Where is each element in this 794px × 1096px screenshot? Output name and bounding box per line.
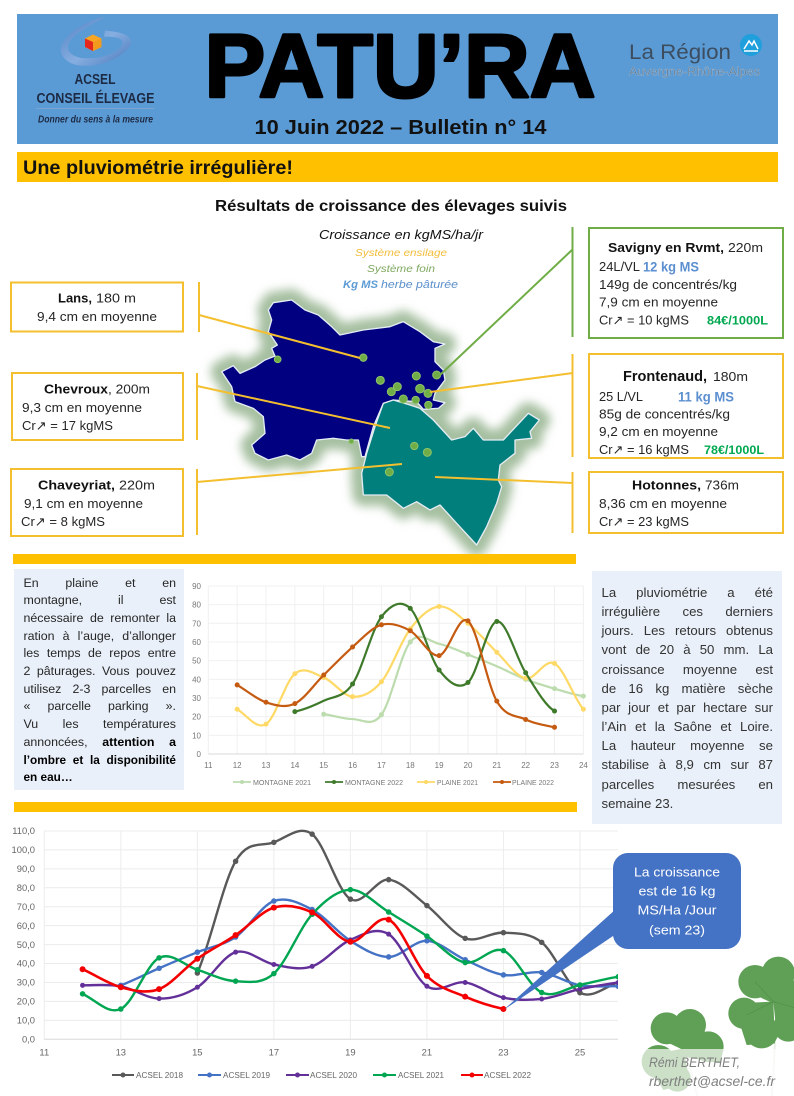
site box: Frontenaud: 78€/1000L: [704, 443, 764, 457]
site box: Hotonnes: [589, 472, 783, 533]
panel: left advice text: En plaine et en: [24, 576, 176, 590]
region: Saône-et-Loire: [222, 300, 445, 460]
chart axis labels: [192, 582, 588, 770]
site box: Savigny en Revermont: Savigny en Rvmt,: [608, 240, 724, 255]
site box: Chaveyriat: 9,1 cm en moyenne: [24, 496, 143, 511]
chart axis labels: [12, 825, 585, 1058]
chart axis labels: 70: [192, 619, 202, 628]
region: Ain: [362, 400, 539, 545]
chart axis labels: 90: [192, 582, 202, 591]
panel: right rainfall text: vont de 20 à 50 mm. La: [602, 642, 773, 657]
callout: growth 16 kg: MS/Ha /Jour: [638, 902, 717, 918]
panel: left advice text: [14, 569, 184, 790]
site box: Chevroux: , 200m: [108, 382, 150, 396]
site box: Frontenaud: 9,2 cm en moyenne: [599, 424, 718, 439]
panel: right rainfall text: par jour et par hectare sur: [602, 700, 773, 715]
header banner: [17, 14, 778, 144]
panel: right rainfall text: croissance moyenne est: [602, 662, 773, 677]
panel: left advice text: annoncées, attention a: [24, 735, 176, 749]
ACSEL logo: [36, 17, 155, 125]
site box: Savigny en Revermont: [589, 228, 783, 338]
chart axis labels: 25: [575, 1046, 585, 1058]
chart axis labels: 20: [192, 713, 202, 722]
site box: Chevroux: Chevroux: [44, 382, 109, 396]
chart axis labels: 22: [521, 761, 531, 770]
map legend: Kg MS: [343, 279, 379, 291]
ACSEL logo: CONSEIL ÉLEVAGE: [36, 90, 155, 107]
panel: right rainfall text: irrégulière ces derniers: [602, 604, 773, 619]
panel: left advice text: 2 pâturages. Vous pouvez: [24, 664, 176, 678]
panel: right rainfall text: l’Ain et la Saône et Loire.: [602, 719, 773, 734]
site box: Lans: Lans,: [58, 290, 92, 306]
callout leader lines: [197, 227, 573, 535]
divider bar: lower: [14, 802, 577, 812]
map legend: Système ensilage: [355, 247, 447, 259]
chart axis labels: 30,0: [17, 977, 35, 988]
chart axis labels: 80: [192, 601, 202, 610]
chart axis labels: 13: [116, 1046, 126, 1058]
panel: right rainfall text: La hauteur moyenne se: [602, 738, 773, 753]
chart axis labels: 11: [204, 761, 213, 770]
panel: left advice text: ration à l’auge, d’allonger: [24, 629, 176, 643]
chart legend: [112, 1071, 532, 1080]
site box: Chaveyriat: Cr↗ = 8 kgMS: [21, 514, 105, 529]
map: Saône-et-Loire and Ain: [222, 300, 539, 545]
chart axis labels: 15: [319, 761, 329, 770]
chart axis labels: 10,0: [17, 1015, 35, 1026]
site box: Hotonnes: 8,36 cm en moyenne: [599, 496, 727, 511]
chart axis labels: 23: [498, 1046, 509, 1058]
chart legend: PLAINE 2021: [437, 778, 478, 787]
site box: Savigny en Revermont: 12 kg MS: [643, 258, 699, 274]
chart legend: ACSEL 2020: [310, 1071, 358, 1080]
chart axis labels: 70,0: [17, 901, 35, 912]
site box: Chevroux: [12, 373, 183, 440]
section heading: results: Résultats de croissance des élevages suivis: [215, 198, 567, 215]
panel: left advice text: les temps de repos entre: [24, 646, 176, 660]
series: MONTAGNE 2021: [324, 637, 583, 722]
series: ACSEL 2022: [83, 906, 503, 1009]
chart legend: ACSEL 2019: [223, 1071, 271, 1080]
site box: Frontenaud: 180m: [713, 369, 748, 384]
chart axis labels: 14: [290, 761, 300, 770]
panel: left advice text: en eau…: [24, 770, 73, 784]
series: ACSEL 2019: [121, 900, 618, 987]
chart axis labels: 11: [39, 1046, 49, 1058]
panel: left advice text: utilisez 2-3 parcelles en: [24, 682, 176, 696]
site box: Lans: [11, 282, 183, 332]
chart axis labels: 21: [492, 761, 502, 770]
chart axis labels: 110,0: [12, 825, 35, 836]
panel: right rainfall text: semaine 23.: [602, 796, 673, 811]
chart axis labels: 0,0: [22, 1034, 35, 1044]
chart axis labels: 23: [550, 761, 559, 770]
site box: Frontenaud: Frontenaud,: [623, 368, 707, 385]
panel: left advice text: nécessaire de remonter la: [24, 611, 176, 625]
panel: right rainfall text: jours. Les retours obtenus: [602, 623, 773, 638]
map legend: herbe pâturée: [381, 279, 458, 291]
headline bar: [17, 152, 778, 182]
site box: Chevroux: 9,3 cm en moyenne: [22, 400, 142, 415]
line chart: ACSEL yearly growth: [12, 825, 618, 1080]
site box: Lans: 9,4 cm en moyenne: [37, 309, 157, 324]
panel: right rainfall text: de 16 kg matière sèche: [602, 681, 773, 696]
site box: Hotonnes: Cr↗ = 23 kgMS: [599, 514, 689, 529]
chart axis labels: 24: [579, 761, 588, 770]
site box: Lans: 180 m: [96, 290, 136, 306]
title: PATU’RA: [204, 17, 596, 117]
chart axis labels: 20: [464, 761, 473, 770]
series: ACSEL 2021: [83, 890, 618, 1010]
Région logo: Auvergne-Rhône-Alpes: [629, 66, 760, 78]
chart legend: MONTAGNE 2021: [253, 778, 311, 787]
chart axis labels: 19: [345, 1046, 356, 1058]
Région logo: La Région: [629, 41, 731, 64]
callout: growth 16 kg: (sem 23): [649, 922, 705, 938]
site box: Savigny en Revermont: 149g de concentrés/kg: [599, 277, 737, 292]
chart legend: [233, 778, 554, 787]
chart axis labels: 18: [406, 761, 415, 770]
map legend: Croissance en kgMS/ha/jr: [319, 227, 484, 242]
site box: Frontenaud: 11 kg MS: [678, 388, 734, 404]
map legend: [319, 227, 484, 291]
series: PLAINE 2021: [237, 606, 583, 725]
chart axis labels: 17: [377, 761, 386, 770]
site box: Savigny en Revermont: 220m: [728, 240, 763, 255]
panel: left advice text: l’ombre et la disponibilité: [24, 753, 176, 767]
chart axis labels: 60,0: [17, 920, 35, 931]
callout: growth 16 kg: La croissance: [634, 864, 720, 880]
site box: Chevroux: Cr↗ = 17 kgMS: [22, 418, 113, 433]
author signature: rberthet@acsel-ce.fr: [649, 1073, 776, 1089]
site box: Hotonnes: Hotonnes,: [632, 478, 701, 492]
site box: Savigny en Revermont: 24L/VL: [599, 259, 640, 274]
chart axis labels: 50: [192, 657, 202, 666]
site box: Frontenaud: 85g de concentrés/kg: [599, 406, 730, 422]
panel: left advice text: Vu les températures: [24, 717, 176, 731]
callout: growth 16 kg: [504, 853, 741, 1010]
site box: Savigny en Revermont: Cr↗ = 10 kgMS: [599, 312, 689, 328]
author signature: Rémi BERTHET,: [649, 1054, 740, 1070]
chart axis labels: 20,0: [17, 996, 35, 1007]
site box: Savigny en Revermont: 84€/1000L: [707, 314, 768, 328]
panel: right rainfall text: parcelles mesurées en: [602, 777, 773, 792]
panel: right rainfall text: La pluviométrie a été: [602, 585, 773, 600]
author signature: [649, 1054, 776, 1089]
chart axis labels: 17: [269, 1046, 279, 1058]
panel: right rainfall text: [592, 571, 782, 824]
chart axis labels: 19: [435, 761, 444, 770]
chart legend: PLAINE 2022: [512, 778, 554, 787]
chart legend: ACSEL 2018: [136, 1071, 184, 1080]
chart axis labels: 90,0: [17, 863, 35, 874]
site box: Savigny en Revermont: 7,9 cm en moyenne: [599, 294, 718, 310]
chart legend: ACSEL 2022: [484, 1071, 532, 1080]
panel: right rainfall text: stabilise à 8,9 cm sur 87: [602, 757, 773, 772]
series: ACSEL 2018: [197, 831, 618, 995]
farm location dots: [274, 354, 441, 476]
chart axis labels: 80,0: [17, 882, 35, 893]
site box: Frontenaud: 25 L/VL: [599, 389, 643, 404]
chart axis labels: 50,0: [17, 939, 35, 950]
chart axis labels: 30: [192, 694, 202, 703]
chart axis labels: 16: [348, 761, 358, 770]
site box: Hotonnes: 736m: [705, 478, 739, 492]
site box: Chaveyriat: [11, 469, 183, 536]
series: ACSEL 2020: [83, 931, 618, 1000]
chart axis labels: 60: [192, 638, 202, 647]
divider bar: upper: [13, 554, 576, 564]
map legend: Système foin: [367, 263, 435, 275]
Région logo: [629, 34, 762, 78]
panel: left advice text: « parcelle parking ».: [24, 699, 176, 713]
chart axis labels: 13: [262, 761, 271, 770]
ACSEL logo: Donner du sens à la mesure: [38, 114, 153, 126]
callout: growth 16 kg: est de 16 kg: [638, 884, 716, 898]
chart axis labels: 12: [233, 761, 242, 770]
chart axis labels: 15: [192, 1046, 203, 1058]
chart axis labels: 10: [192, 731, 202, 740]
chart axis labels: 21: [422, 1046, 432, 1058]
site box: Frontenaud: [589, 354, 783, 458]
series: PLAINE 2022: [237, 620, 555, 727]
site box: Frontenaud: Cr↗ = 16 kgMS: [599, 442, 689, 457]
bulletin date: 10 Juin 2022 – Bulletin n° 14: [254, 117, 547, 139]
headline bar: Une pluviométrie irrégulière!: [23, 158, 293, 179]
clover decoration: [640, 957, 794, 1096]
site box: Chaveyriat: Chaveyriat,: [38, 478, 115, 492]
chart axis labels: 40: [192, 675, 202, 684]
chart legend: MONTAGNE 2022: [345, 778, 403, 787]
chart axis labels: 40,0: [17, 958, 35, 969]
chart axis labels: 0: [197, 750, 202, 759]
ACSEL logo: ACSEL: [74, 72, 116, 88]
series: MONTAGNE 2022: [295, 604, 555, 712]
chart legend: ACSEL 2021: [398, 1071, 445, 1080]
panel: left advice text: montagne, il est: [24, 593, 176, 607]
site box: Chaveyriat: 220m: [119, 478, 155, 492]
line chart: montagne and plaine growth: [192, 582, 588, 787]
chart axis labels: 100,0: [12, 844, 35, 855]
